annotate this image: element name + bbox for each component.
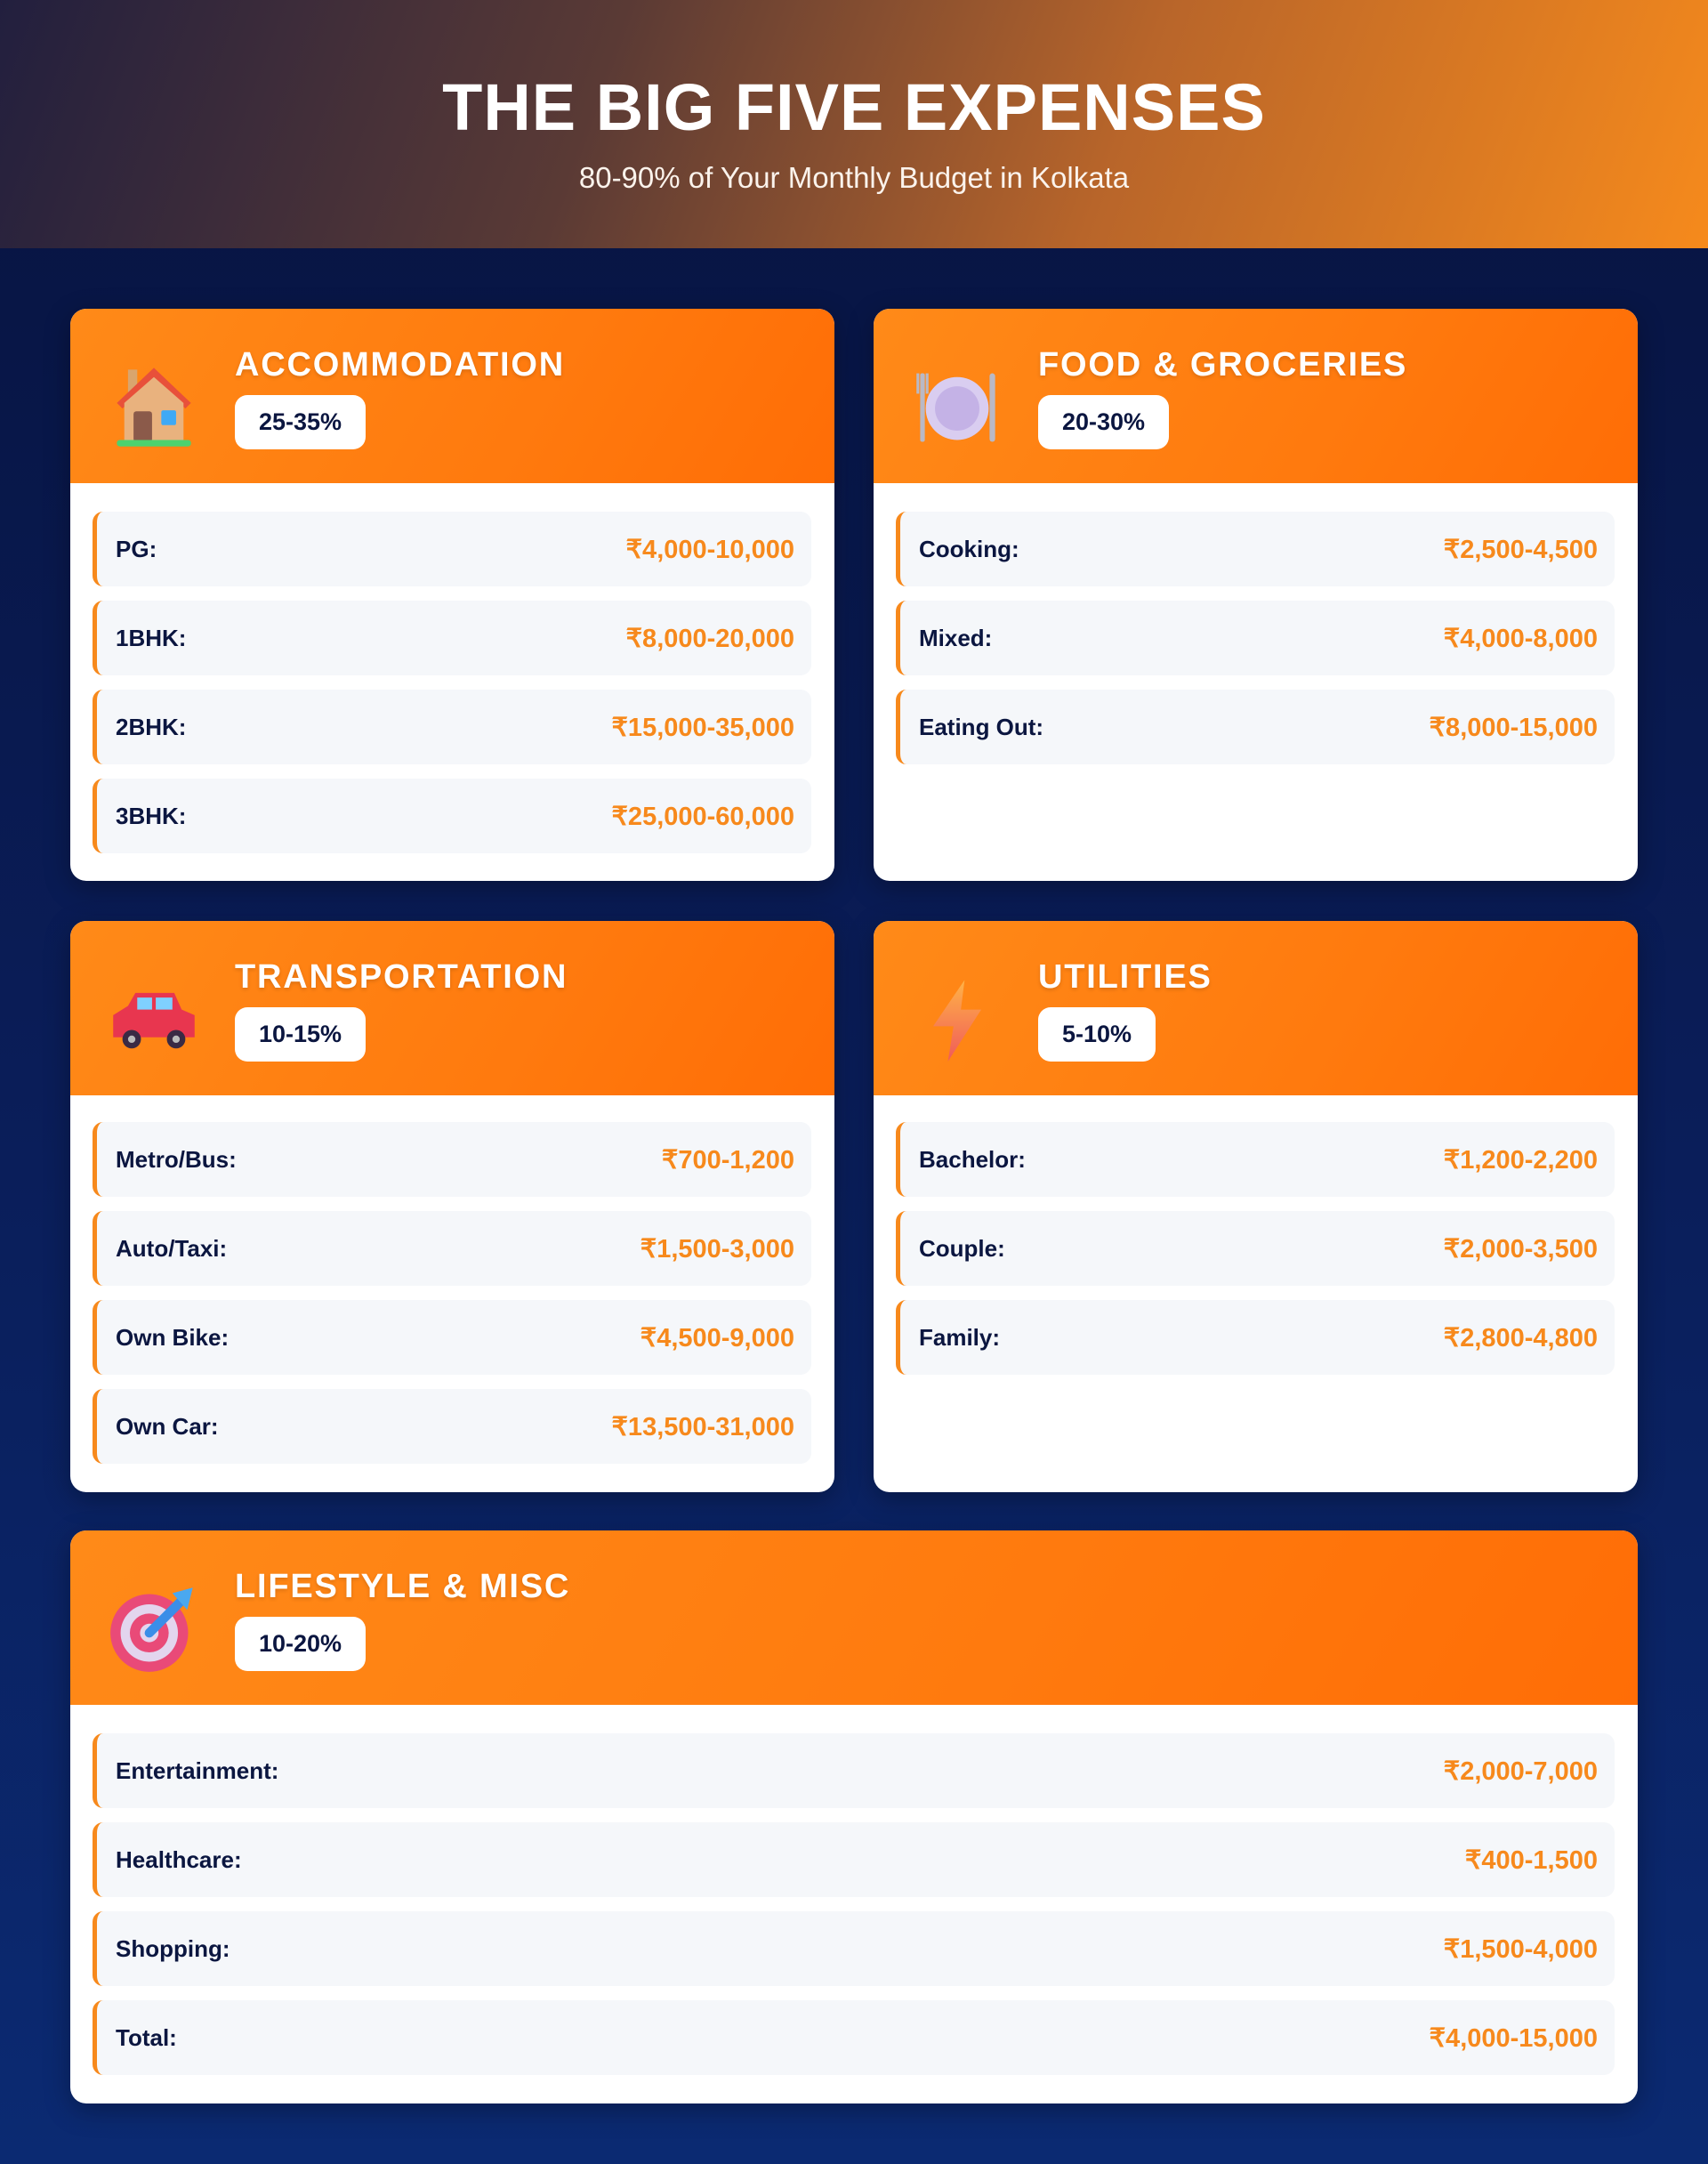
row — [93, 512, 811, 586]
row: Family: — [919, 1324, 1000, 1351]
row: Mixed: — [919, 625, 992, 651]
icon: car — [113, 993, 195, 1048]
panel: food — [874, 309, 1638, 881]
badge — [1038, 1007, 1156, 1062]
row — [896, 690, 1615, 764]
row — [93, 1822, 1615, 1897]
row: Eating Out: — [919, 714, 1043, 740]
row — [93, 1122, 811, 1197]
badge: 25-35% — [259, 408, 342, 435]
row: ₹8,000-20,000 — [626, 625, 794, 653]
badge: 10-20% — [259, 1630, 342, 1657]
row — [93, 1300, 811, 1375]
row: ₹1,200-2,200 — [1444, 1146, 1598, 1175]
row: Cooking: — [919, 536, 1019, 562]
heading: FOOD & GROCERIES — [1038, 346, 1407, 384]
row: 2BHK: — [116, 714, 186, 740]
row: ₹2,000-3,500 — [1444, 1235, 1598, 1264]
heading: TRANSPORTATION — [235, 958, 568, 996]
row: ₹2,500-4,500 — [1444, 536, 1598, 564]
row: Entertainment: — [116, 1756, 278, 1783]
row: ₹8,000-15,000 — [1430, 714, 1598, 742]
row — [93, 1211, 811, 1286]
icon: plate — [916, 374, 995, 441]
row: Auto/Taxi: — [116, 1235, 227, 1262]
row: ₹13,500-31,000 — [611, 1413, 794, 1441]
row: ₹4,500-9,000 — [640, 1324, 794, 1352]
row: Healthcare: — [116, 1845, 242, 1872]
row: ₹15,000-35,000 — [611, 714, 794, 742]
panel: lifestyle — [70, 1530, 1638, 2103]
heading: ACCOMMODATION — [235, 346, 565, 384]
row: ₹400-1,500 — [1465, 1845, 1598, 1874]
row: Metro/Bus: — [116, 1146, 237, 1173]
row — [896, 1122, 1615, 1197]
row — [896, 1300, 1615, 1375]
row: Couple: — [919, 1235, 1005, 1262]
header banner — [0, 0, 1708, 248]
panel: accommodation — [70, 309, 834, 881]
row: Shopping: — [116, 1934, 230, 1961]
row — [896, 601, 1615, 675]
row: ₹1,500-4,000 — [1444, 1934, 1598, 1963]
badge: 5-10% — [1062, 1021, 1132, 1047]
row — [93, 1911, 1615, 1986]
row: ₹2,800-4,800 — [1444, 1324, 1598, 1352]
row — [93, 779, 811, 853]
badge — [235, 1007, 366, 1062]
badge: 20-30% — [1062, 408, 1145, 435]
row: Bachelor: — [919, 1146, 1026, 1173]
badge: 10-15% — [259, 1021, 342, 1047]
title: THE BIG FIVE EXPENSES — [442, 70, 1266, 144]
row: Own Car: — [116, 1413, 219, 1440]
row: ₹2,000-7,000 — [1444, 1756, 1598, 1785]
row: ₹700-1,200 — [662, 1146, 794, 1175]
row — [93, 1733, 1615, 1808]
heading: UTILITIES — [1038, 958, 1213, 996]
row: ₹4,000-15,000 — [1430, 2023, 1598, 2052]
row: ₹4,000-8,000 — [1444, 625, 1598, 653]
row: PG: — [116, 536, 157, 562]
row — [93, 2000, 1615, 2075]
row — [896, 512, 1615, 586]
row: ₹4,000-10,000 — [626, 536, 794, 564]
icon: house — [117, 368, 191, 447]
row — [93, 601, 811, 675]
row — [93, 690, 811, 764]
panel: transportation — [70, 921, 834, 1492]
heading: LIFESTYLE & MISC — [235, 1568, 570, 1605]
row: ₹1,500-3,000 — [640, 1235, 794, 1264]
row: Total: — [116, 2023, 177, 2050]
row: Own Bike: — [116, 1324, 229, 1351]
panel: utilities — [874, 921, 1638, 1492]
row — [896, 1211, 1615, 1286]
icon: lightning — [933, 981, 981, 1062]
badge — [235, 1617, 366, 1671]
icon: target — [110, 1587, 193, 1672]
row — [93, 1389, 811, 1464]
badge — [235, 395, 366, 449]
row: 3BHK: — [116, 803, 186, 829]
subtitle: 80-90% of Your Monthly Budget in Kolkata — [579, 161, 1129, 194]
badge — [1038, 395, 1169, 449]
row: 1BHK: — [116, 625, 186, 651]
row: ₹25,000-60,000 — [611, 803, 794, 831]
